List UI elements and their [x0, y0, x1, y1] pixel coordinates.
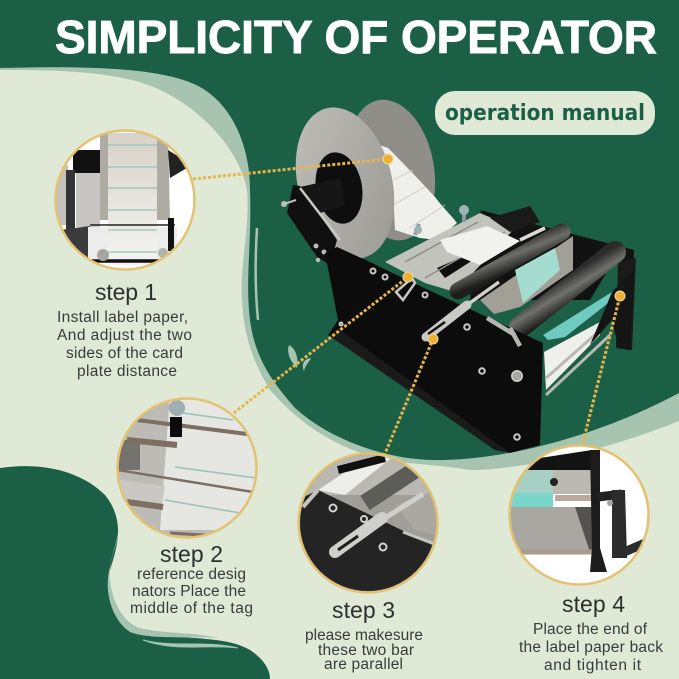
right side plate leg: [590, 270, 634, 350]
leader line step 4: [582, 296, 620, 446]
step 4 description: the label paper back: [519, 639, 663, 656]
step 1 heading: step 1: [95, 279, 157, 305]
leader line step 1: [193, 159, 388, 179]
leader line step 3: [384, 339, 433, 456]
step 3 description: are parallel: [324, 656, 403, 673]
rear side plate: [480, 210, 634, 350]
step 3 heading: step 3: [332, 597, 395, 623]
operation manual pill: [435, 91, 655, 135]
step 1 description: [57, 309, 192, 380]
decorative leaves: [288, 345, 311, 371]
adjuster bracket and wing nut: [396, 205, 520, 346]
spool shaft and arm: [281, 178, 345, 265]
step 1 description: plate distance: [77, 363, 177, 380]
step 2 description: [130, 566, 253, 617]
spool rear disc: [336, 93, 446, 247]
step 1 circle: [55, 130, 195, 270]
step 4 heading: step 4: [562, 591, 625, 617]
step 4 circle: [509, 445, 649, 585]
callout dots: [383, 154, 625, 344]
step 3 circle: [298, 453, 438, 600]
step 4 description: and tighten it: [544, 657, 642, 674]
step 3 description: [305, 627, 423, 673]
step 2 circle: [117, 395, 260, 538]
operation manual pill: operation manual: [445, 101, 645, 126]
step 2 description: nators Place the: [132, 583, 246, 600]
beige plate and teal label: [480, 236, 573, 314]
dark deck behind rollers: [470, 212, 620, 300]
label strip on rails: [440, 226, 520, 265]
step 3 description: these two bar: [318, 642, 414, 659]
step 4 description: [519, 621, 663, 674]
rails and silver rods: [385, 206, 545, 292]
step 1 description: Install label paper,: [57, 309, 188, 326]
title: SIMPLICITY OF OPERATOR: [55, 11, 657, 63]
bottom-left green wave: [0, 466, 270, 679]
step 4 description: Place the end of: [533, 621, 648, 638]
product photo: label applicator machine: [281, 93, 636, 453]
spool hub: [310, 149, 368, 227]
front side plate: [325, 247, 543, 453]
step 1 description: sides of the card: [66, 345, 183, 362]
base flange: [328, 330, 510, 453]
label roll paper: [373, 143, 457, 240]
upper roller: [458, 232, 562, 291]
spool front disc: [281, 97, 409, 269]
leader line step 2: [230, 277, 408, 416]
step 1 description: And adjust the two: [57, 327, 192, 344]
step 3 description: please makesure: [305, 627, 423, 644]
step 2 heading: step 2: [160, 541, 223, 567]
lower teal strip and white backing: [543, 292, 612, 340]
step 2 description: reference desig: [137, 566, 246, 583]
lower roller: [520, 252, 615, 327]
mounting bolts on plate: [340, 268, 522, 440]
step 2 description: middle of the tag: [130, 600, 253, 617]
